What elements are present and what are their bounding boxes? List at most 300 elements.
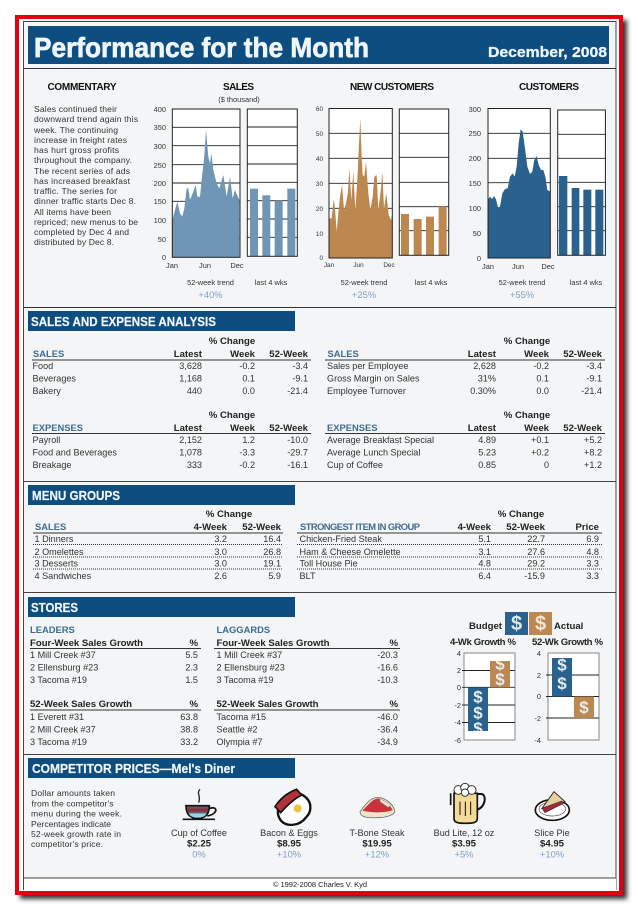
table: expenses: EXPENSES bbox=[32, 422, 83, 433]
table: laggards: Tacoma #15 bbox=[216, 712, 266, 722]
table: average prices: Cup of Coffee bbox=[327, 460, 383, 470]
bar: budget: $ bbox=[557, 656, 567, 674]
table: strongest item in group: 27.6 bbox=[527, 547, 545, 557]
table: average prices: +0.2 bbox=[531, 448, 549, 458]
table: menu sales: 4-Week bbox=[194, 522, 228, 533]
section heading: SALES AND EXPENSE ANALYSIS bbox=[31, 314, 216, 329]
axis labels: 2 bbox=[537, 671, 541, 680]
item: bud lite: Bud Lite, 12 oz bbox=[434, 828, 495, 838]
new customers x axis labels: Dec bbox=[383, 262, 395, 269]
table: sales: 3,628 bbox=[179, 361, 202, 371]
table: sales ratios: 31% bbox=[478, 374, 496, 384]
new customers captions: 52-week trend bbox=[341, 278, 387, 287]
table: strongest item in group: 4.8 bbox=[586, 547, 599, 557]
table: sales: 1,168 bbox=[179, 374, 202, 384]
table: menu sales: 52-Week bbox=[242, 522, 282, 533]
table: laggards: -34.9 bbox=[377, 737, 398, 747]
table: sales: -3.4 bbox=[292, 361, 308, 371]
commentary text: dinner traffic starts Dec 8. bbox=[34, 196, 136, 206]
table: sales: 0.0 bbox=[242, 386, 255, 396]
item: cup of coffee: $2.25 bbox=[187, 838, 212, 850]
table: average prices: Average Lunch Special bbox=[327, 448, 420, 458]
table: expenses bbox=[32, 410, 311, 470]
table: laggards: 2 Ellensburg #23 bbox=[216, 662, 285, 672]
panel: competitor prices bbox=[28, 758, 570, 860]
table: expenses: 333 bbox=[187, 460, 202, 470]
table: sales: % Change bbox=[209, 336, 255, 347]
chart: sales last 4 weeks bars bbox=[247, 109, 297, 256]
sales captions: +40% bbox=[198, 289, 223, 300]
legend: budget and actual: Actual bbox=[554, 621, 583, 632]
section heading bbox=[28, 597, 295, 617]
table: strongest item in group: STRONGEST ITEM IN GROUP bbox=[300, 521, 420, 532]
legend: budget and actual bbox=[469, 612, 583, 635]
table: menu sales: 3.2 bbox=[214, 534, 227, 544]
title: Performance for the Month bbox=[34, 32, 369, 63]
new customers y axis labels: 20 bbox=[316, 206, 323, 213]
table: strongest item in group: -15.9 bbox=[524, 571, 545, 581]
table: strongest item in group: 6.4 bbox=[478, 571, 491, 581]
chart: customers 52-week area bbox=[488, 108, 550, 258]
axis labels: 4 bbox=[457, 649, 461, 658]
table: laggards: 1 Mill Creek #37 bbox=[216, 650, 282, 660]
table: menu sales: 3.0 bbox=[214, 558, 227, 568]
table: leaders: % bbox=[189, 638, 198, 649]
competitor note: Percentages indicate bbox=[31, 819, 111, 829]
competitor note: competitor's price. bbox=[31, 839, 103, 849]
table: sales ratios: 0.30% bbox=[470, 386, 496, 396]
commentary text bbox=[33, 104, 138, 247]
bar: actual: $ bbox=[495, 654, 505, 674]
section heading bbox=[28, 758, 295, 778]
competitor note: from the competitor's bbox=[32, 798, 114, 808]
item: bud lite: +5% bbox=[454, 848, 474, 860]
table: average prices bbox=[325, 410, 605, 470]
panel: commentary bbox=[33, 82, 138, 247]
item: cup of coffee: 0% bbox=[192, 848, 206, 860]
bar: budget: $ bbox=[473, 688, 483, 706]
table: laggards: 52-Week Sales Growth bbox=[216, 699, 319, 710]
table: strongest item in group: 4.8 bbox=[478, 558, 491, 568]
table: leaders: Four-Week Sales Growth bbox=[30, 638, 143, 649]
table: average prices: +0.1 bbox=[531, 435, 549, 445]
table: sales ratios: -9.1 bbox=[586, 374, 602, 384]
new customers y axis labels: 50 bbox=[316, 131, 323, 138]
table: leaders: LEADERS bbox=[30, 624, 75, 635]
panel: sales and expense analysis bbox=[28, 311, 605, 470]
table: leaders: 2.3 bbox=[185, 662, 198, 672]
new customers captions: last 4 wks bbox=[415, 278, 448, 287]
bar: actual: $ bbox=[495, 670, 505, 689]
table: sales: Food bbox=[32, 361, 53, 371]
chart: sales 52-week area bbox=[172, 109, 240, 257]
chart: 52-week growth bbox=[532, 637, 603, 745]
table: laggards: LAGGARDS bbox=[216, 624, 270, 635]
table: leaders: 52-Week Sales Growth bbox=[30, 699, 132, 710]
bar: budget: $ bbox=[557, 674, 567, 693]
table: leaders: 5.5 bbox=[185, 650, 198, 660]
table: strongest item in group: 3.1 bbox=[478, 547, 491, 557]
table: strongest item in group: 52-Week bbox=[506, 522, 546, 533]
bar: budget bbox=[468, 687, 488, 731]
competitor note bbox=[31, 788, 122, 849]
item: t-bone steak: +12% bbox=[365, 848, 389, 860]
table: average prices: Latest bbox=[468, 423, 497, 434]
table: menu sales: 1 Dinners bbox=[34, 534, 74, 544]
table: sales ratios: -3.4 bbox=[586, 361, 602, 371]
table: laggards: Seattle #2 bbox=[216, 724, 257, 734]
table: menu sales: 2 Omelettes bbox=[34, 547, 84, 557]
table: laggards: Olympia #7 bbox=[216, 737, 262, 747]
bar: budget bbox=[552, 656, 572, 696]
legend: budget and actual: $ bbox=[535, 613, 546, 635]
new customers y axis labels bbox=[316, 106, 323, 262]
customers x axis labels: Jan bbox=[482, 262, 494, 271]
table: expenses: -0.2 bbox=[239, 460, 255, 470]
icon: bacon and eggs bbox=[275, 789, 310, 825]
table: expenses: 52-Week bbox=[269, 423, 309, 434]
table: sales ratios: SALES bbox=[328, 348, 359, 359]
new customers captions: +25% bbox=[352, 289, 376, 300]
table: menu sales: 4 Sandwiches bbox=[34, 571, 92, 581]
table: laggards: % bbox=[389, 638, 398, 649]
table: average prices: Week bbox=[524, 423, 550, 434]
table: sales: -0.2 bbox=[239, 361, 255, 371]
panel: menu groups bbox=[28, 485, 602, 581]
table: sales ratios: 2,628 bbox=[473, 361, 496, 371]
commentary text: has increased breakfast bbox=[34, 176, 131, 186]
table: laggards: -20.3 bbox=[377, 650, 398, 660]
item: t-bone steak: $19.95 bbox=[362, 838, 392, 850]
sales x axis labels: Jan bbox=[166, 261, 178, 270]
table: menu sales bbox=[33, 509, 283, 581]
table: average prices: +5.2 bbox=[584, 435, 602, 445]
table: strongest item in group: % Change bbox=[498, 509, 544, 520]
customers x axis labels bbox=[482, 262, 555, 271]
commentary text: week. The continuing bbox=[33, 125, 118, 135]
table: laggards: % bbox=[389, 699, 398, 710]
table: sales: 52-Week bbox=[269, 349, 309, 360]
icon: steak bbox=[360, 797, 395, 818]
table: leaders: 2 Mill Creek #37 bbox=[30, 724, 96, 734]
section heading: MENU GROUPS bbox=[32, 488, 120, 503]
table: average prices: +8.2 bbox=[584, 448, 602, 458]
table: sales: SALES bbox=[33, 348, 64, 359]
table: sales: -9.1 bbox=[292, 374, 308, 384]
table: leaders: 2 Ellensburg #23 bbox=[30, 662, 98, 672]
chart: 4-week growth bbox=[450, 637, 516, 745]
table: menu sales: 19.1 bbox=[263, 558, 281, 568]
new customers y axis labels: 30 bbox=[316, 181, 323, 188]
sales heading: SALES bbox=[223, 82, 254, 93]
table: sales bbox=[32, 336, 311, 396]
bar: actual bbox=[490, 661, 510, 688]
sales y axis labels: 350 bbox=[154, 123, 166, 132]
date: December, 2008 bbox=[488, 45, 607, 61]
customers captions: 52-week trend bbox=[499, 278, 545, 287]
item: bacon and eggs bbox=[260, 789, 318, 860]
table: menu sales: 26.8 bbox=[263, 547, 281, 557]
sales y axis labels: 0 bbox=[162, 253, 166, 262]
table: sales: Beverages bbox=[32, 374, 76, 384]
item: t-bone steak bbox=[349, 797, 405, 860]
axis labels: -2 bbox=[534, 714, 541, 723]
sales unit: ($ thousand) bbox=[218, 95, 260, 104]
legend: budget and actual: $ bbox=[511, 613, 522, 635]
sales captions bbox=[187, 278, 288, 300]
axis labels bbox=[534, 649, 541, 745]
sales y axis labels: 300 bbox=[154, 142, 166, 151]
table: laggards: -46.0 bbox=[377, 712, 398, 722]
axis labels: -4 bbox=[534, 736, 541, 745]
table: strongest item in group: BLT bbox=[300, 571, 316, 581]
commentary text: repriced; new menus to be bbox=[34, 217, 138, 227]
customers heading: CUSTOMERS bbox=[519, 82, 579, 93]
sales y axis labels: 50 bbox=[158, 235, 166, 244]
table: expenses: -29.7 bbox=[287, 448, 308, 458]
table: strongest item in group: 22.7 bbox=[527, 534, 545, 544]
table: sales: Latest bbox=[174, 349, 203, 360]
table: average prices: EXPENSES bbox=[327, 422, 378, 433]
competitor note: Dollar amounts taken bbox=[31, 788, 115, 798]
table: strongest item in group: 29.2 bbox=[527, 558, 545, 568]
table: strongest item in group: 3.3 bbox=[586, 558, 599, 568]
sales y axis labels: 400 bbox=[154, 105, 166, 114]
table: average prices: Average Breakfast Special bbox=[327, 435, 434, 445]
table: leaders: 63.8 bbox=[180, 712, 198, 722]
new customers heading: NEW CUSTOMERS bbox=[350, 82, 434, 93]
table: strongest item in group: Chicken-Fried Steak bbox=[300, 534, 382, 544]
table: expenses: Payroll bbox=[32, 435, 60, 445]
table: average prices: +1.2 bbox=[584, 460, 602, 470]
item: bud lite bbox=[434, 783, 495, 860]
sales y axis labels bbox=[154, 105, 166, 262]
table: sales: 440 bbox=[187, 386, 202, 396]
table: laggards: Four-Week Sales Growth bbox=[216, 638, 330, 649]
table: average prices: % Change bbox=[504, 410, 550, 421]
section heading bbox=[28, 311, 295, 331]
table: sales ratios: -0.2 bbox=[533, 361, 549, 371]
new customers x axis labels: Jan bbox=[324, 262, 335, 269]
new customers y axis labels: 0 bbox=[319, 255, 323, 262]
table: sales ratios: % Change bbox=[504, 336, 550, 347]
table: expenses: Week bbox=[230, 423, 256, 434]
customers y axis labels: 0 bbox=[477, 254, 481, 263]
legend: budget and actual: Budget bbox=[469, 621, 503, 632]
customers y axis labels bbox=[469, 105, 481, 263]
customers captions bbox=[499, 278, 603, 300]
sales x axis labels: Jun bbox=[199, 261, 211, 270]
axis labels: 0 bbox=[457, 683, 461, 692]
title banner bbox=[28, 26, 609, 64]
new customers x axis labels bbox=[324, 262, 395, 269]
table: sales ratios: 0.1 bbox=[536, 374, 549, 384]
bar: budget: $ bbox=[473, 719, 483, 738]
table: average prices: 4.89 bbox=[478, 435, 496, 445]
table: sales ratios: Latest bbox=[468, 349, 497, 360]
table: average prices: 5.23 bbox=[478, 448, 496, 458]
customers x axis labels: Dec bbox=[541, 262, 555, 271]
table: sales ratios: 0.0 bbox=[536, 386, 549, 396]
icon: coffee cup bbox=[183, 789, 216, 819]
table: strongest item in group: Price bbox=[576, 522, 599, 533]
axis labels: -2 bbox=[454, 701, 461, 710]
chart: new customers 52-week area bbox=[329, 108, 392, 258]
table: leaders: 3 Tacoma #19 bbox=[30, 675, 87, 685]
item: slice pie: +10% bbox=[540, 848, 564, 860]
table: expenses: Breakage bbox=[32, 460, 71, 470]
table: sales ratios: Week bbox=[524, 349, 550, 360]
axis labels bbox=[454, 649, 461, 745]
customers y axis labels: 250 bbox=[469, 129, 481, 138]
panel: stores bbox=[28, 597, 603, 747]
table: sales: 0.1 bbox=[242, 374, 255, 384]
table: sales ratios: -21.4 bbox=[581, 386, 602, 396]
table: leaders: 38.8 bbox=[180, 724, 198, 734]
table: sales ratios: 52-Week bbox=[563, 349, 603, 360]
table: menu sales: 3.0 bbox=[214, 547, 227, 557]
table: leaders: 3 Tacoma #19 bbox=[30, 737, 87, 747]
table: strongest item in group: 3.3 bbox=[586, 571, 599, 581]
table: sales ratios: Employee Turnover bbox=[327, 386, 406, 396]
table: expenses: % Change bbox=[209, 410, 255, 421]
table: menu sales: 16.4 bbox=[263, 534, 281, 544]
table: strongest item in group bbox=[297, 509, 602, 581]
customers y axis labels: 50 bbox=[473, 229, 481, 238]
item: slice pie bbox=[534, 792, 570, 860]
table: leaders: 1 Everett #31 bbox=[30, 712, 84, 722]
chart: customers last 4 weeks bars bbox=[558, 110, 605, 255]
icon: beer mug bbox=[451, 783, 485, 823]
axis labels: 4 bbox=[537, 649, 541, 658]
table: expenses: -3.3 bbox=[239, 448, 255, 458]
sales y axis labels: 150 bbox=[154, 197, 166, 206]
axis labels: 0 bbox=[537, 692, 541, 701]
table: strongest item in group: Toll House Pie bbox=[300, 558, 358, 568]
sales x axis labels bbox=[166, 261, 244, 270]
table: expenses: 1.2 bbox=[242, 435, 255, 445]
table: expenses: 1,078 bbox=[179, 448, 202, 458]
new customers captions bbox=[341, 278, 448, 300]
section heading: COMPETITOR PRICES—Mel's Diner bbox=[32, 761, 235, 776]
item: bacon and eggs: Bacon & Eggs bbox=[260, 828, 318, 838]
table: expenses: 2,152 bbox=[179, 435, 202, 445]
table: strongest item in group: 6.9 bbox=[586, 534, 599, 544]
item: t-bone steak: T-Bone Steak bbox=[349, 828, 405, 838]
chart: 52-week growth: 52-Wk Growth % bbox=[532, 637, 603, 648]
commentary text: downward trend again this bbox=[34, 114, 138, 124]
competitor note: 52-week growth rate in bbox=[31, 829, 121, 839]
customers y axis labels: 100 bbox=[469, 204, 481, 213]
customers captions: +55% bbox=[510, 289, 534, 300]
table: strongest item in group: Ham & Cheese Omelette bbox=[300, 547, 401, 557]
table: expenses: -16.1 bbox=[287, 460, 308, 470]
commentary text: distributed by Dec 8. bbox=[34, 237, 114, 247]
icon: pie slice bbox=[535, 792, 569, 820]
table: average prices: 52-Week bbox=[563, 423, 603, 434]
chart: 4-week growth: 4-Wk Growth % bbox=[450, 637, 516, 648]
customers y axis labels: 200 bbox=[469, 154, 481, 163]
table: laggards: -10.3 bbox=[377, 675, 398, 685]
table: expenses: Latest bbox=[174, 423, 203, 434]
item: bacon and eggs: $8.95 bbox=[277, 838, 302, 850]
table: leaders: 1 Mill Creek #37 bbox=[30, 650, 96, 660]
new customers x axis labels: Jun bbox=[353, 262, 364, 269]
customers x axis labels: Jun bbox=[512, 262, 524, 271]
table: sales: Bakery bbox=[32, 386, 61, 396]
commentary heading: COMMENTARY bbox=[48, 82, 117, 93]
item: bacon and eggs: +10% bbox=[277, 848, 301, 860]
table: menu sales: 2.6 bbox=[214, 571, 227, 581]
item: slice pie: $4.95 bbox=[540, 838, 565, 850]
new customers y axis labels: 10 bbox=[316, 231, 323, 238]
customers y axis labels: 300 bbox=[469, 105, 481, 114]
axis labels: -6 bbox=[454, 736, 461, 745]
table: strongest item in group: 4-Week bbox=[458, 522, 492, 533]
panel: new customers charts bbox=[316, 82, 449, 300]
table: sales ratios: Gross Margin on Sales bbox=[327, 374, 420, 384]
new customers y axis labels: 60 bbox=[316, 106, 323, 113]
new customers y axis labels: 40 bbox=[316, 156, 323, 163]
item: cup of coffee: Cup of Coffee bbox=[171, 828, 227, 838]
competitor note: menu during the week. bbox=[31, 808, 122, 818]
commentary text: throughout the company. bbox=[34, 155, 132, 165]
table: sales ratios bbox=[325, 336, 605, 396]
commentary text: All items have been bbox=[34, 207, 111, 217]
commentary text: has hurt gross profits bbox=[34, 145, 119, 155]
table: sales: -21.4 bbox=[287, 386, 308, 396]
sales y axis labels: 200 bbox=[154, 179, 166, 188]
table: expenses: -10.0 bbox=[287, 435, 308, 445]
commentary text: Sales continued their bbox=[34, 104, 117, 114]
table: average prices: 0.85 bbox=[478, 460, 496, 470]
table: laggards: -36.4 bbox=[377, 724, 398, 734]
table: sales: Week bbox=[230, 349, 256, 360]
table: strongest item in group: 5.1 bbox=[478, 534, 491, 544]
bar: budget: $ bbox=[473, 704, 483, 722]
commentary text: increase in freight rates bbox=[34, 135, 127, 145]
section heading: STORES bbox=[31, 600, 78, 615]
item: slice pie: Slice Pie bbox=[534, 828, 570, 838]
table: laggards: -16.6 bbox=[377, 662, 398, 672]
table: laggards bbox=[214, 624, 400, 747]
sales y axis labels: 250 bbox=[154, 161, 166, 170]
customers y axis labels: 150 bbox=[469, 179, 481, 188]
table: leaders: % bbox=[189, 699, 198, 710]
item: cup of coffee bbox=[171, 789, 227, 860]
table: leaders: 33.2 bbox=[180, 737, 198, 747]
commentary text: traffic. The series for bbox=[34, 186, 117, 196]
table: leaders: 1.5 bbox=[185, 675, 198, 685]
table: laggards: 3 Tacoma #19 bbox=[216, 675, 273, 685]
item: bud lite: $3.95 bbox=[452, 838, 477, 850]
sales x axis labels: Dec bbox=[230, 261, 244, 270]
sales captions: 52-week trend bbox=[187, 278, 234, 287]
table: menu sales: 5.9 bbox=[268, 571, 281, 581]
table: sales ratios: Sales per Employee bbox=[327, 361, 408, 371]
table: average prices: 0 bbox=[544, 460, 549, 470]
axis labels: 2 bbox=[457, 666, 461, 675]
axis labels: -4 bbox=[454, 718, 461, 727]
table: menu sales: SALES bbox=[35, 521, 66, 532]
commentary text: The recent series of ads bbox=[34, 166, 130, 176]
sales captions: last 4 wks bbox=[255, 278, 288, 287]
table: menu sales: % Change bbox=[206, 509, 252, 520]
bar: actual: $ bbox=[579, 698, 589, 717]
sales y axis labels: 100 bbox=[154, 216, 166, 225]
chart: new customers last 4 weeks bars bbox=[399, 109, 449, 255]
panel: customers charts bbox=[469, 82, 605, 300]
